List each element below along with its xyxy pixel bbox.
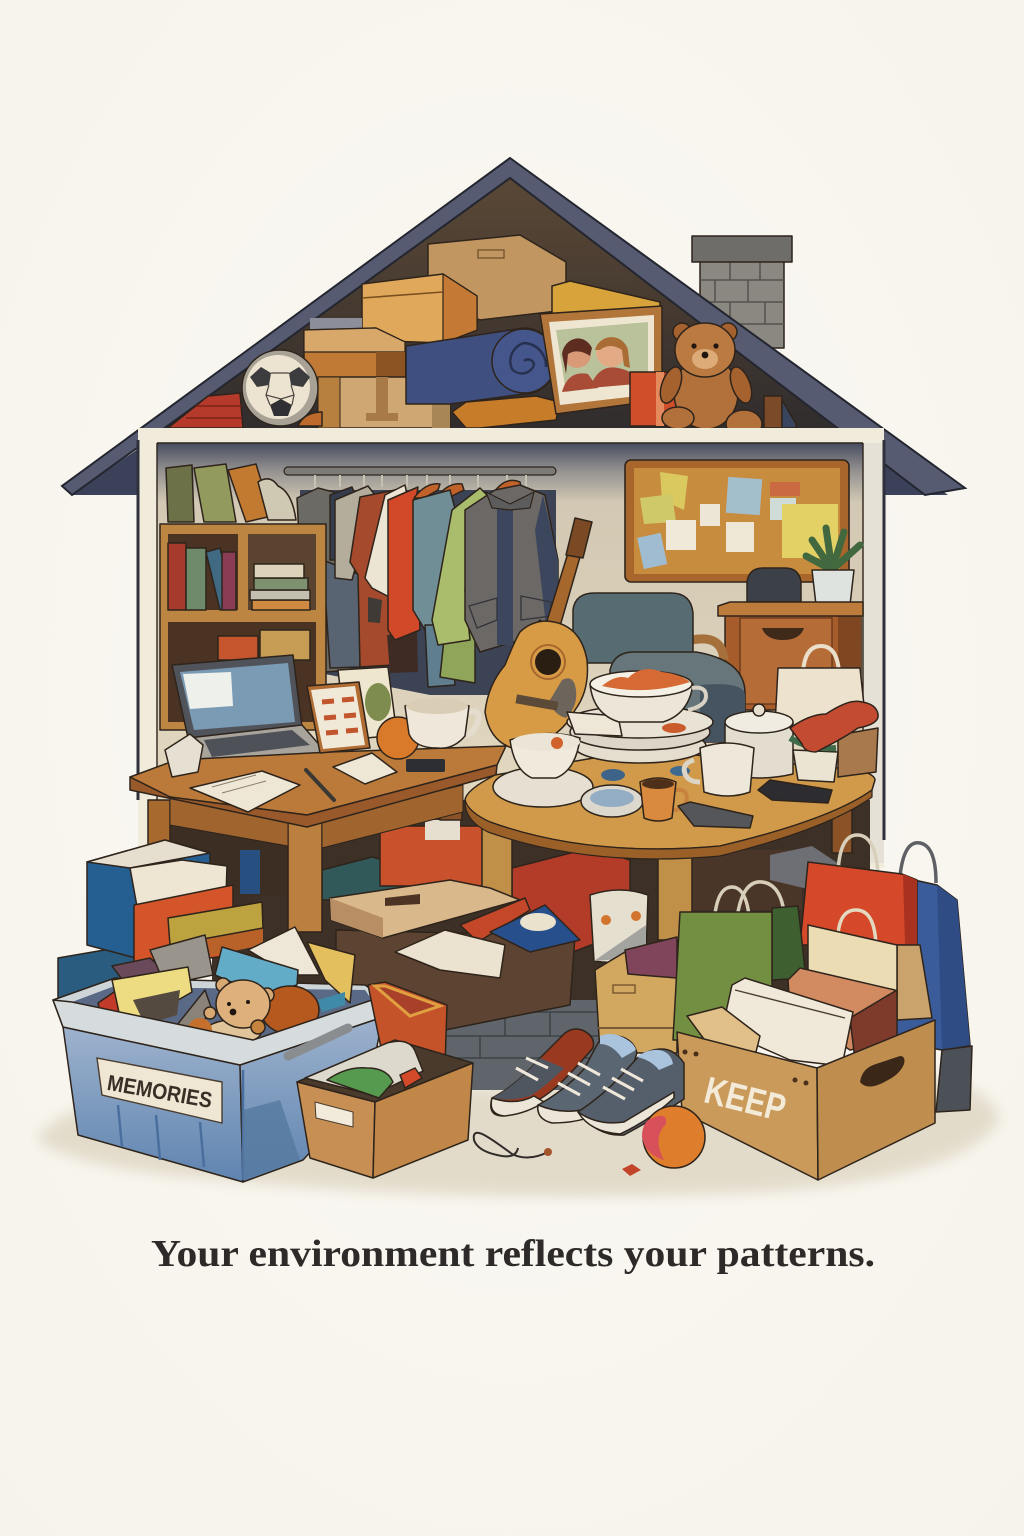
bin front rim [53,1000,387,1065]
house roof [62,158,965,495]
sneakers [491,1029,684,1135]
small teddy bear in bin [188,978,274,1044]
stacked plates and bowls [567,669,713,763]
white mug on desk [405,698,478,748]
round table [465,750,875,940]
small red scrap [622,1164,641,1176]
paper cup on desk [165,734,203,777]
red sneaker [491,1029,594,1116]
laptop [172,655,330,775]
yellow folders [552,281,660,320]
phones on table [601,766,832,828]
desk front edge [130,765,497,827]
orange fruit [377,717,419,759]
desk legs [148,790,462,932]
rolled blue mat [406,328,556,404]
armchair [573,593,745,742]
front wooden crate [297,1040,473,1178]
clothes rail [284,467,558,695]
memories bin [53,927,387,1182]
red gift box [630,372,696,426]
white cooking pot [725,704,793,778]
bin body [63,1017,383,1182]
soccer ball [242,350,318,426]
keep label: KEEP [700,1070,790,1130]
wooden cabinet [718,602,863,710]
bin rim and cavity [53,978,387,1065]
brick base [445,1000,600,1090]
beige bag [808,910,932,1020]
orange tub [368,982,447,1067]
small dish [581,785,643,817]
box: top attic carton [428,235,566,320]
desk top [130,746,506,815]
left desk [130,746,506,932]
attic storage [168,235,796,438]
red box beside ball [168,393,243,428]
books above bookcase [166,464,296,522]
keep box contents [687,968,897,1066]
grey sneaker [538,1034,637,1123]
orange ball [642,1106,705,1168]
grey parcel behind [310,318,362,330]
teddy bear on shelf [656,323,762,438]
clutter under tables [170,800,870,1026]
memories label: MEMORIES [105,1070,214,1113]
keep cardboard box [677,1020,935,1180]
left stacked boxes [58,840,263,1000]
floor shadow [36,1070,1000,1197]
rolled brown parcel [452,396,560,428]
green bag [673,882,806,1040]
table top [465,750,875,849]
clipboard and picture [307,667,397,753]
hanging garments [297,480,558,695]
box: left attic carton [304,328,405,380]
bin contents [98,927,355,1034]
cork notice board [625,460,849,582]
small drawer box [595,937,677,1053]
papers and pen on desk [190,753,445,812]
orange mug [640,778,687,821]
bookcase [160,524,326,730]
small orange piece by box [298,412,322,426]
memories label [97,1058,222,1123]
blue bag [860,843,970,1050]
white cylinder [590,890,648,962]
small boxes right [764,396,796,428]
box: lower attic carton [318,377,450,428]
acoustic guitar [485,518,592,750]
framed family photo [540,306,662,414]
interior wall and shelf [138,428,884,868]
red bag [800,835,917,945]
front bowl and plate [493,733,593,807]
central boxes and papers [330,880,580,1030]
potted plant [806,528,860,605]
shopping bags [673,835,970,1050]
blue sneaker [578,1049,684,1135]
bin handle [288,1028,348,1056]
black device on cabinet [747,568,801,602]
desk drawers [170,785,463,848]
grey box behind keep box [936,1046,972,1112]
chimney [692,236,792,348]
beige shopping bag [774,646,866,744]
box: middle attic carton [362,274,477,343]
basket with red cloth [790,701,878,782]
caption: Your environment reflects your patterns. [151,1233,875,1275]
table legs [482,805,852,940]
white mug on table [684,743,754,796]
coiled cable [474,1133,552,1158]
